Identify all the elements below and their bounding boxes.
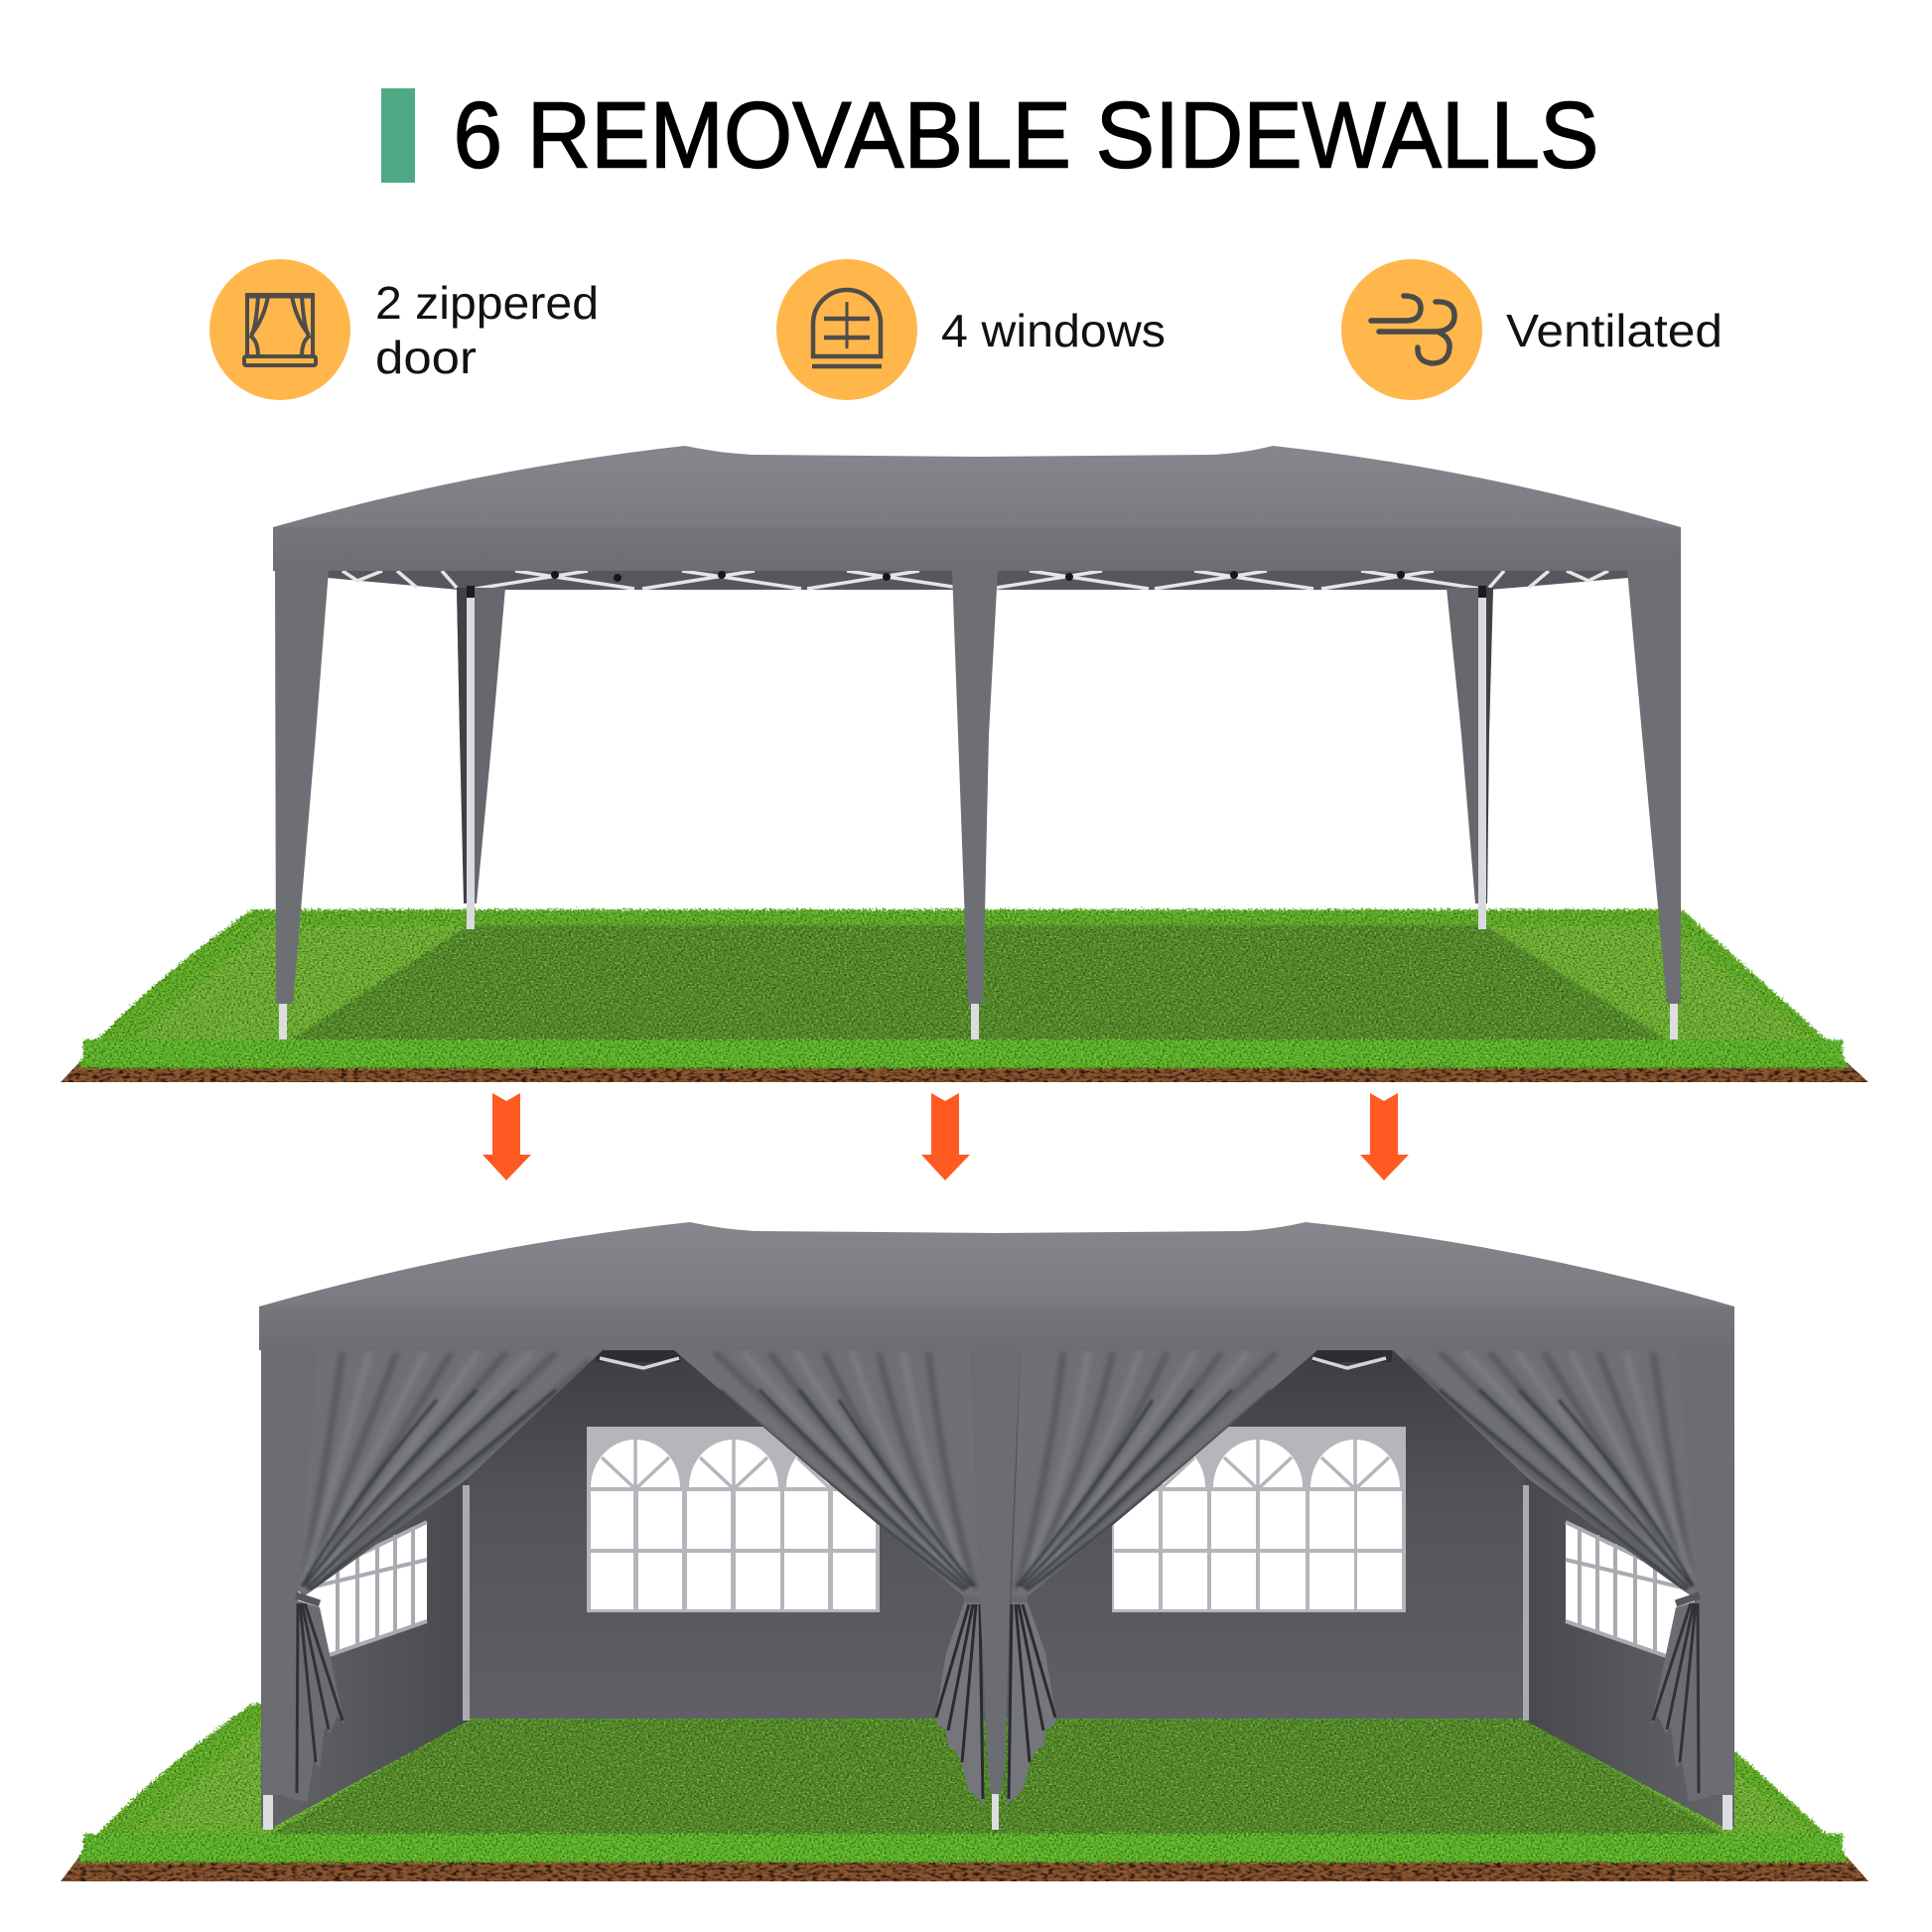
truss joints: [551, 571, 1405, 582]
grass front strip: [83, 1834, 1843, 1862]
curtain: inner left: [670, 1350, 985, 1805]
back wall: [467, 1350, 1527, 1719]
left corner panel: [261, 1350, 320, 1795]
back-right pole: [1523, 1485, 1529, 1721]
truss frame: [343, 571, 1608, 589]
right side wall: [1525, 1350, 1734, 1827]
right side window: [1566, 1522, 1695, 1666]
back-left pole: [463, 1485, 470, 1721]
roof top: [259, 1222, 1734, 1307]
far left drape: [286, 1600, 345, 1802]
soil: [61, 1062, 1868, 1082]
left side window: [298, 1522, 427, 1666]
arrow: right: [1360, 1093, 1409, 1180]
canopy underside: [328, 570, 1628, 590]
right back window: [1112, 1427, 1406, 1612]
lawn: upper: [61, 909, 1868, 1082]
icon: curtain: [209, 259, 350, 400]
left pin: [263, 1795, 273, 1830]
feature: 4 windows: [776, 259, 1166, 400]
right pin: [1723, 1795, 1732, 1830]
title accent bar: [381, 88, 415, 183]
left side wall: [261, 1350, 469, 1827]
front left leg: [275, 570, 329, 1039]
icon: wind: [1341, 259, 1482, 400]
far left tie: [296, 1595, 320, 1603]
grass side field: [134, 1720, 1812, 1834]
soil: [61, 1857, 1868, 1881]
inner left drape: [935, 1602, 985, 1805]
feature: ventilated: [1341, 259, 1723, 400]
label: 4 windows: [941, 305, 1166, 356]
grass outer: [77, 1704, 1849, 1863]
curtain: inner right: [1007, 1350, 1321, 1805]
valance: [259, 1307, 1734, 1350]
grass front strip: [83, 1039, 1843, 1067]
canopy peek left: [596, 1350, 680, 1368]
title text: 6 REMOVABLE SIDEWALLS: [453, 83, 1598, 189]
center pin: [992, 1792, 999, 1830]
front right leg: [1627, 570, 1681, 1039]
center pillar: [971, 1350, 1021, 1794]
right corner panel: [1676, 1350, 1734, 1795]
label: 2 zippered: [375, 277, 599, 329]
left back window: [587, 1427, 880, 1612]
curtain: far left: [286, 1350, 616, 1802]
grass outer: [77, 909, 1849, 1068]
front middle leg: [952, 570, 998, 1039]
rear left leg: [457, 586, 505, 929]
roof top: [273, 446, 1681, 527]
lawn: lower: [61, 1704, 1868, 1881]
grass field: [134, 925, 1812, 1039]
floor grass: [272, 1719, 1724, 1834]
feature: 2 zippered door: door: [375, 332, 477, 383]
tent shadow: [290, 925, 1666, 1039]
title: [381, 83, 1598, 189]
label: Ventilated: [1506, 305, 1723, 356]
feature: 2 zippered door: [209, 259, 599, 400]
canopy peek right: [1312, 1350, 1392, 1368]
tent: with sidewalls: [259, 1222, 1734, 1834]
arrow: middle: [921, 1093, 970, 1180]
valance: [273, 527, 1681, 571]
curtain: far right: [1380, 1350, 1710, 1802]
rear right leg: [1447, 586, 1493, 929]
icon: arched window: [776, 259, 917, 400]
arrow: left: [483, 1093, 531, 1180]
inner left tie: [964, 1596, 980, 1602]
tent: open frame: [273, 446, 1681, 1039]
